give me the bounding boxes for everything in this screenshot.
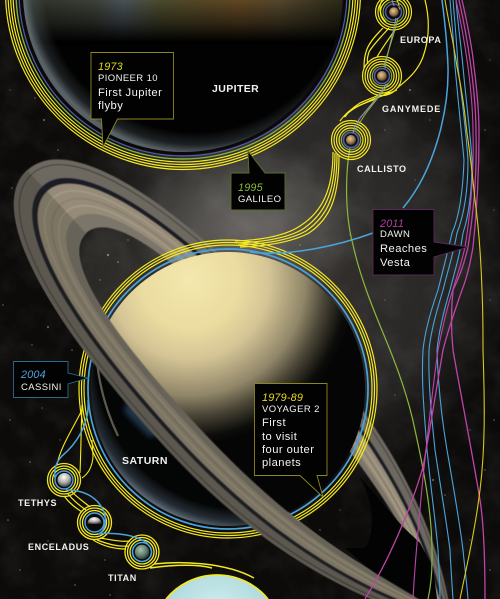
callout: Voyager 2: [254, 384, 327, 497]
moon: Enceladus: [78, 506, 112, 540]
callout: Pioneer 10: [91, 52, 174, 147]
callout: Galileo: 1995: [238, 182, 264, 194]
Saturn shadow on rings: [345, 477, 437, 599]
label: Titan: TITAN: [108, 573, 137, 583]
flight paths: links between Saturn moons: [55, 400, 148, 549]
flight paths: grey-violet and green line through Jovian moons: [353, 0, 398, 133]
label: Enceladus: ENCELADUS: [28, 542, 89, 552]
flight paths: yellow links between Jovian moons: [340, 0, 428, 121]
flight path: green probe line: [347, 147, 432, 599]
label: Europa: EUROPA: [400, 35, 441, 45]
callout: Voyager 2: First: [262, 417, 286, 429]
moon: Titan: [125, 535, 159, 569]
callout: Cassini: CASSINI: [21, 382, 62, 393]
planet: Jupiter: [20, 0, 343, 155]
callout: Dawn: DAWN: [380, 229, 410, 240]
moon: Europa: [376, 0, 412, 30]
callout: Voyager 2: VOYAGER 2: [262, 404, 320, 415]
flight paths: yellow lines from Titan to Uranus: [150, 563, 254, 578]
label: Ganymede: GANYMEDE: [382, 104, 441, 114]
label: Tethys: TETHYS: [18, 498, 57, 508]
planet: Saturn globe: [91, 252, 365, 526]
callout: Dawn: Reaches: [380, 243, 427, 255]
callout: Voyager 2: planets: [262, 457, 301, 469]
moon: Tethys: [48, 464, 80, 496]
callout: Voyager 2: four outer: [262, 444, 314, 456]
Jupiter orbit lines: [6, 0, 360, 170]
flight paths: yellow lines from Saturn to Tethys: [57, 405, 93, 478]
callout: Dawn: [373, 210, 468, 275]
Saturn orbit lines: [79, 240, 377, 538]
flight path: right-hand yellow line: [445, 0, 484, 599]
planet: Uranus: [166, 575, 268, 599]
callout: Voyager 2: to visit: [262, 431, 298, 443]
callout: Pioneer 10: PIONEER 10: [98, 73, 158, 84]
flight paths: right-hand blue bundle: [422, 0, 472, 599]
flight paths: magenta bundle: [365, 0, 485, 599]
callout: Voyager 2: 1979-89: [262, 392, 303, 404]
callout: Pioneer 10: 1973: [98, 61, 123, 73]
label: Jupiter: JUPITER: [212, 83, 259, 95]
callout: Dawn: Vesta: [380, 257, 411, 269]
moon: Callisto: [332, 120, 370, 160]
callout: Galileo: [231, 151, 285, 210]
callout: Dawn: 2011: [379, 218, 404, 230]
flight paths: yellow bundle from Callisto to Saturn: [235, 152, 339, 247]
moon: Ganymede: [362, 56, 402, 96]
callout: Cassini: [14, 362, 88, 398]
label: Saturn: SATURN: [122, 455, 168, 467]
callout: Galileo: GALILEO: [238, 194, 281, 205]
callout: Pioneer 10: First Jupiter: [98, 87, 162, 99]
Saturn rings: near side: [14, 170, 420, 599]
flight path: Dawn blue line: [250, 0, 448, 253]
callout: Pioneer 10: flyby: [98, 100, 123, 112]
callout: Cassini: 2004: [20, 369, 46, 381]
label: Callisto: CALLISTO: [357, 164, 407, 174]
